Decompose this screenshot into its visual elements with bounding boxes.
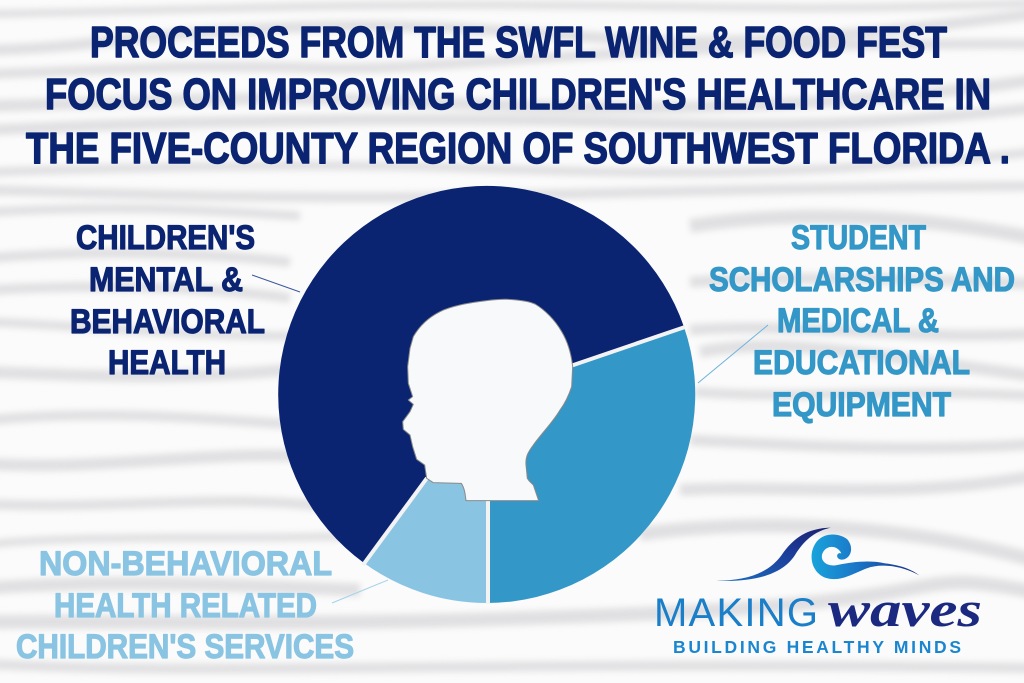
leader line: mental health [252,275,300,292]
label: student scholarships and equipment: STUDENT [791,219,926,257]
label: children's mental and behavioral health: BEHAVIORAL [70,303,265,341]
label: student scholarships and equipment: MEDICAL & [777,302,939,340]
logo text: waves: waves [828,581,982,637]
leader line: non-behavioral [332,580,388,603]
icon: child head silhouette [403,299,573,501]
logo text: tagline: BUILDING HEALTHY MINDS [673,637,961,657]
label: non-behavioral services: CHILDREN'S SERVICES [16,628,354,666]
segment: non-behavioral services [364,394,488,603]
leader line: scholarships [698,325,768,383]
icon: wave [716,528,919,581]
label: non-behavioral services: NON-BEHAVIORAL [39,545,332,583]
label: non-behavioral services [16,545,354,666]
title [26,18,1010,173]
logo text: MAKING: MAKING [654,591,818,635]
label: student scholarships and equipment: EDUCATIONAL [753,344,970,382]
label: student scholarships and equipment: EQUIPMENT [772,386,951,424]
logo: Making Waves [654,528,982,657]
label: children's mental and behavioral health: CHILDREN'S [76,219,255,257]
label: non-behavioral services: HEALTH RELATED [54,587,317,625]
label: children's mental and behavioral health: HEALTH [108,344,226,382]
segment: children's mental and behavioral health [278,186,684,563]
label: children's mental and behavioral health: MENTAL & [89,261,243,299]
segment: student scholarships and equipment [488,327,695,603]
label: student scholarships and equipment [709,219,1015,424]
segment dividers [363,327,685,604]
donut chart with child silhouette [278,186,695,604]
label: children's mental and behavioral health [70,219,265,382]
